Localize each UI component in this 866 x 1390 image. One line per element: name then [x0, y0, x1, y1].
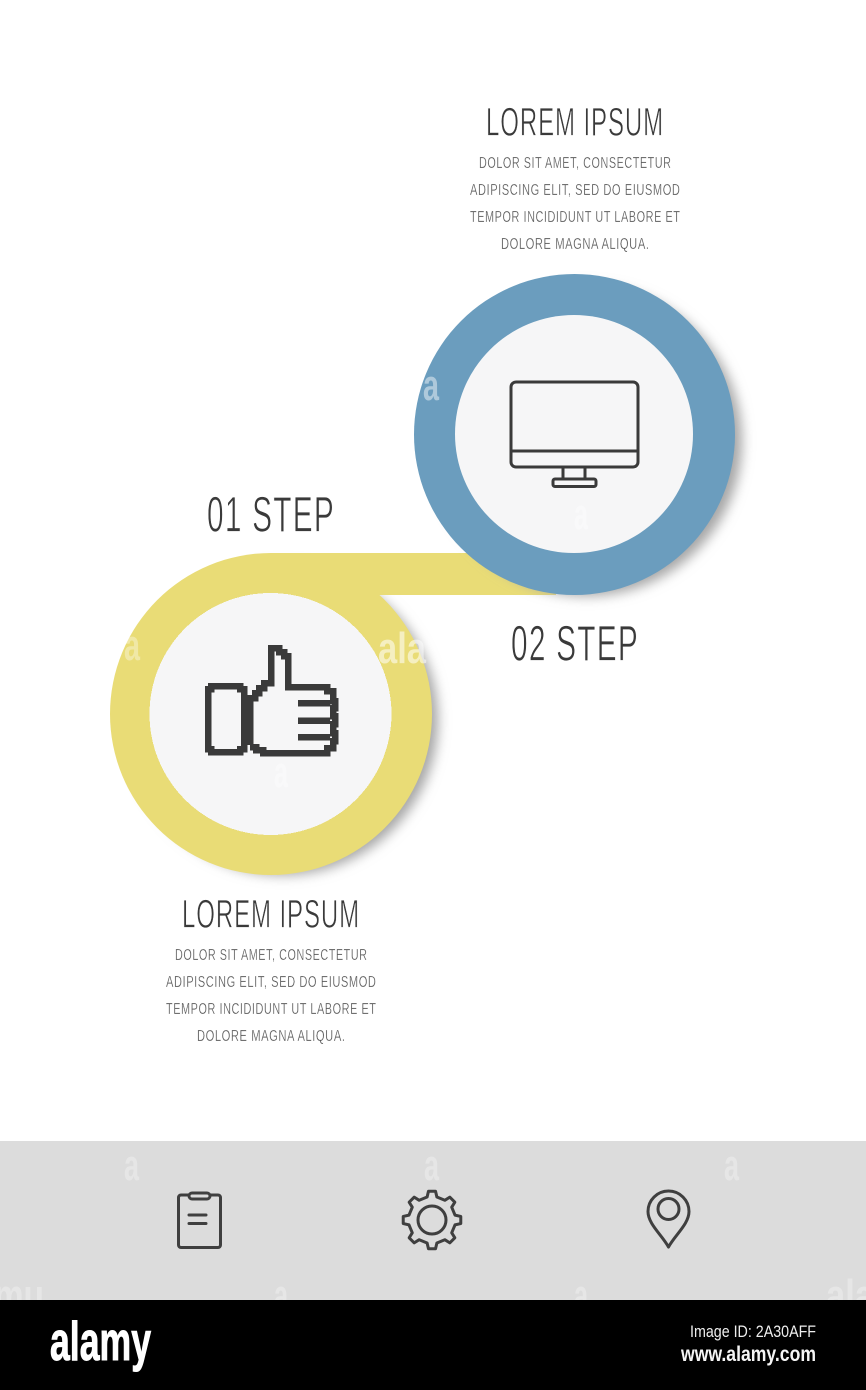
panel: black footer [0, 1300, 866, 1390]
watermark marks: a [724, 1141, 739, 1190]
text block: step 1 description: TEMPOR INCIDIDUNT UT LABORE ET [166, 1001, 376, 1018]
heading: step 2 title: LOREM IPSUM [486, 100, 664, 144]
text block: step 2 description: DOLORE MAGNA ALIQUA. [501, 236, 650, 253]
heading: step 1 title: LOREM IPSUM [182, 892, 360, 936]
text: website: www.alamy.com [680, 1343, 816, 1366]
panel: grey icon band [0, 1141, 866, 1300]
text block: step 1 description: DOLORE MAGNA ALIQUA. [197, 1028, 346, 1045]
watermark marks: a [124, 621, 140, 670]
watermark marks: a [124, 1141, 139, 1190]
watermark marks: a [574, 1271, 588, 1320]
text block: step 2 description: DOLOR SIT AMET, CONSECTETUR [479, 155, 672, 172]
text block: step 1 description [166, 947, 376, 1045]
label: 02 step: 02 STEP [511, 616, 639, 672]
watermark marks: a [574, 490, 588, 539]
icon: gear [403, 1191, 461, 1249]
text block: step 2 description [470, 155, 680, 253]
text block: step 2 description: TEMPOR INCIDIDUNT UT LABORE ET [470, 209, 680, 226]
icon: clipboard [178, 1193, 220, 1248]
icon: desktop monitor [511, 382, 638, 486]
watermark marks [0, 361, 866, 1320]
text block: step 1 description: DOLOR SIT AMET, CONSECTETUR [175, 947, 368, 964]
icon: map pin [648, 1191, 689, 1247]
watermark marks: a [423, 361, 439, 410]
panel: step 2 blue ring [414, 274, 742, 596]
watermark marks: a [274, 1271, 288, 1320]
watermark marks: a [274, 748, 288, 797]
icon: thumbs up [208, 648, 335, 753]
watermark marks: a [424, 1141, 439, 1190]
text block: step 1 description: ADIPISCING ELIT, SED DO EIUSMOD [166, 974, 376, 991]
panel: step 1 yellow ring with connector [110, 553, 556, 875]
text block: step 2 description: ADIPISCING ELIT, SED DO EIUSMOD [470, 182, 680, 199]
logo: alamy: alamy [50, 1310, 151, 1372]
watermark marks: ala [378, 624, 426, 673]
label: 01 step: 01 STEP [207, 486, 335, 542]
text: image id: Image ID: 2A30AFF [690, 1322, 816, 1341]
